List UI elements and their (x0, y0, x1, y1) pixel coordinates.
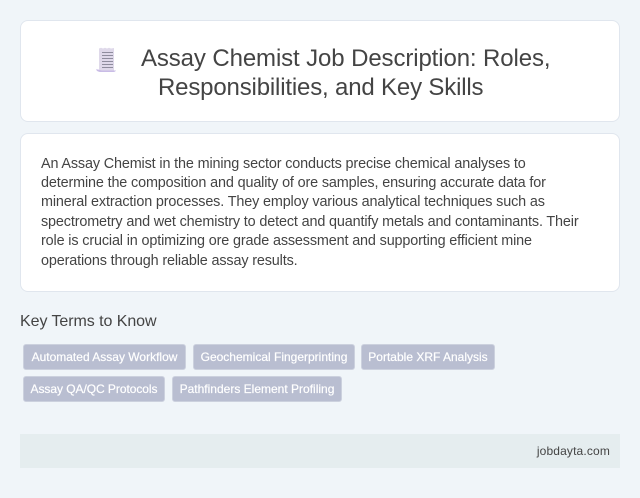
text block: description (41, 156, 578, 269)
tag: pathfinders element profiling: Pathfinders Element Profiling (180, 382, 334, 396)
tag: automated assay workflow (23, 344, 186, 370)
panel: description (20, 133, 620, 292)
tag: assay qa/qc protocols (23, 376, 165, 402)
tag: automated assay workflow: Automated Assay Workflow (32, 350, 177, 364)
text block: description: spectrometry and wet chemistry to detect and quantify metals and contaminants. Their (41, 214, 578, 230)
text block: description: operations through reliable assay results. (41, 253, 298, 269)
tag: pathfinders element profiling (172, 376, 342, 402)
tag: geochemical fingerprinting (193, 344, 355, 370)
footer bar (20, 434, 620, 468)
heading: key terms: Key Terms to Know (20, 313, 157, 330)
text block: description: determine the composition and quality of ore samples, ensuring accurate data for (41, 175, 546, 191)
tag: portable xrf analysis (361, 344, 495, 370)
text block: description: mineral extraction processes. They employ various analytical techniques such as (41, 194, 545, 210)
title: Responsibilities, and Key Skills (158, 74, 483, 101)
footer source text: jobdayta.com (537, 444, 610, 458)
tag: portable xrf analysis: Portable XRF Analysis (368, 350, 488, 364)
panel: title card (20, 20, 620, 122)
title: Assay Chemist Job Description: Roles, (141, 45, 550, 72)
text block: description: role is crucial in optimizing ore grade assessment and supporting efficient mine (41, 233, 532, 249)
tag: assay qa/qc protocols: Assay QA/QC Protocols (30, 382, 158, 396)
tag: geochemical fingerprinting: Geochemical Fingerprinting (201, 350, 347, 364)
icon: scroll document (96, 48, 116, 72)
text block: description: An Assay Chemist in the mining sector conducts precise chemical analyses to (41, 156, 526, 172)
title (141, 45, 550, 101)
